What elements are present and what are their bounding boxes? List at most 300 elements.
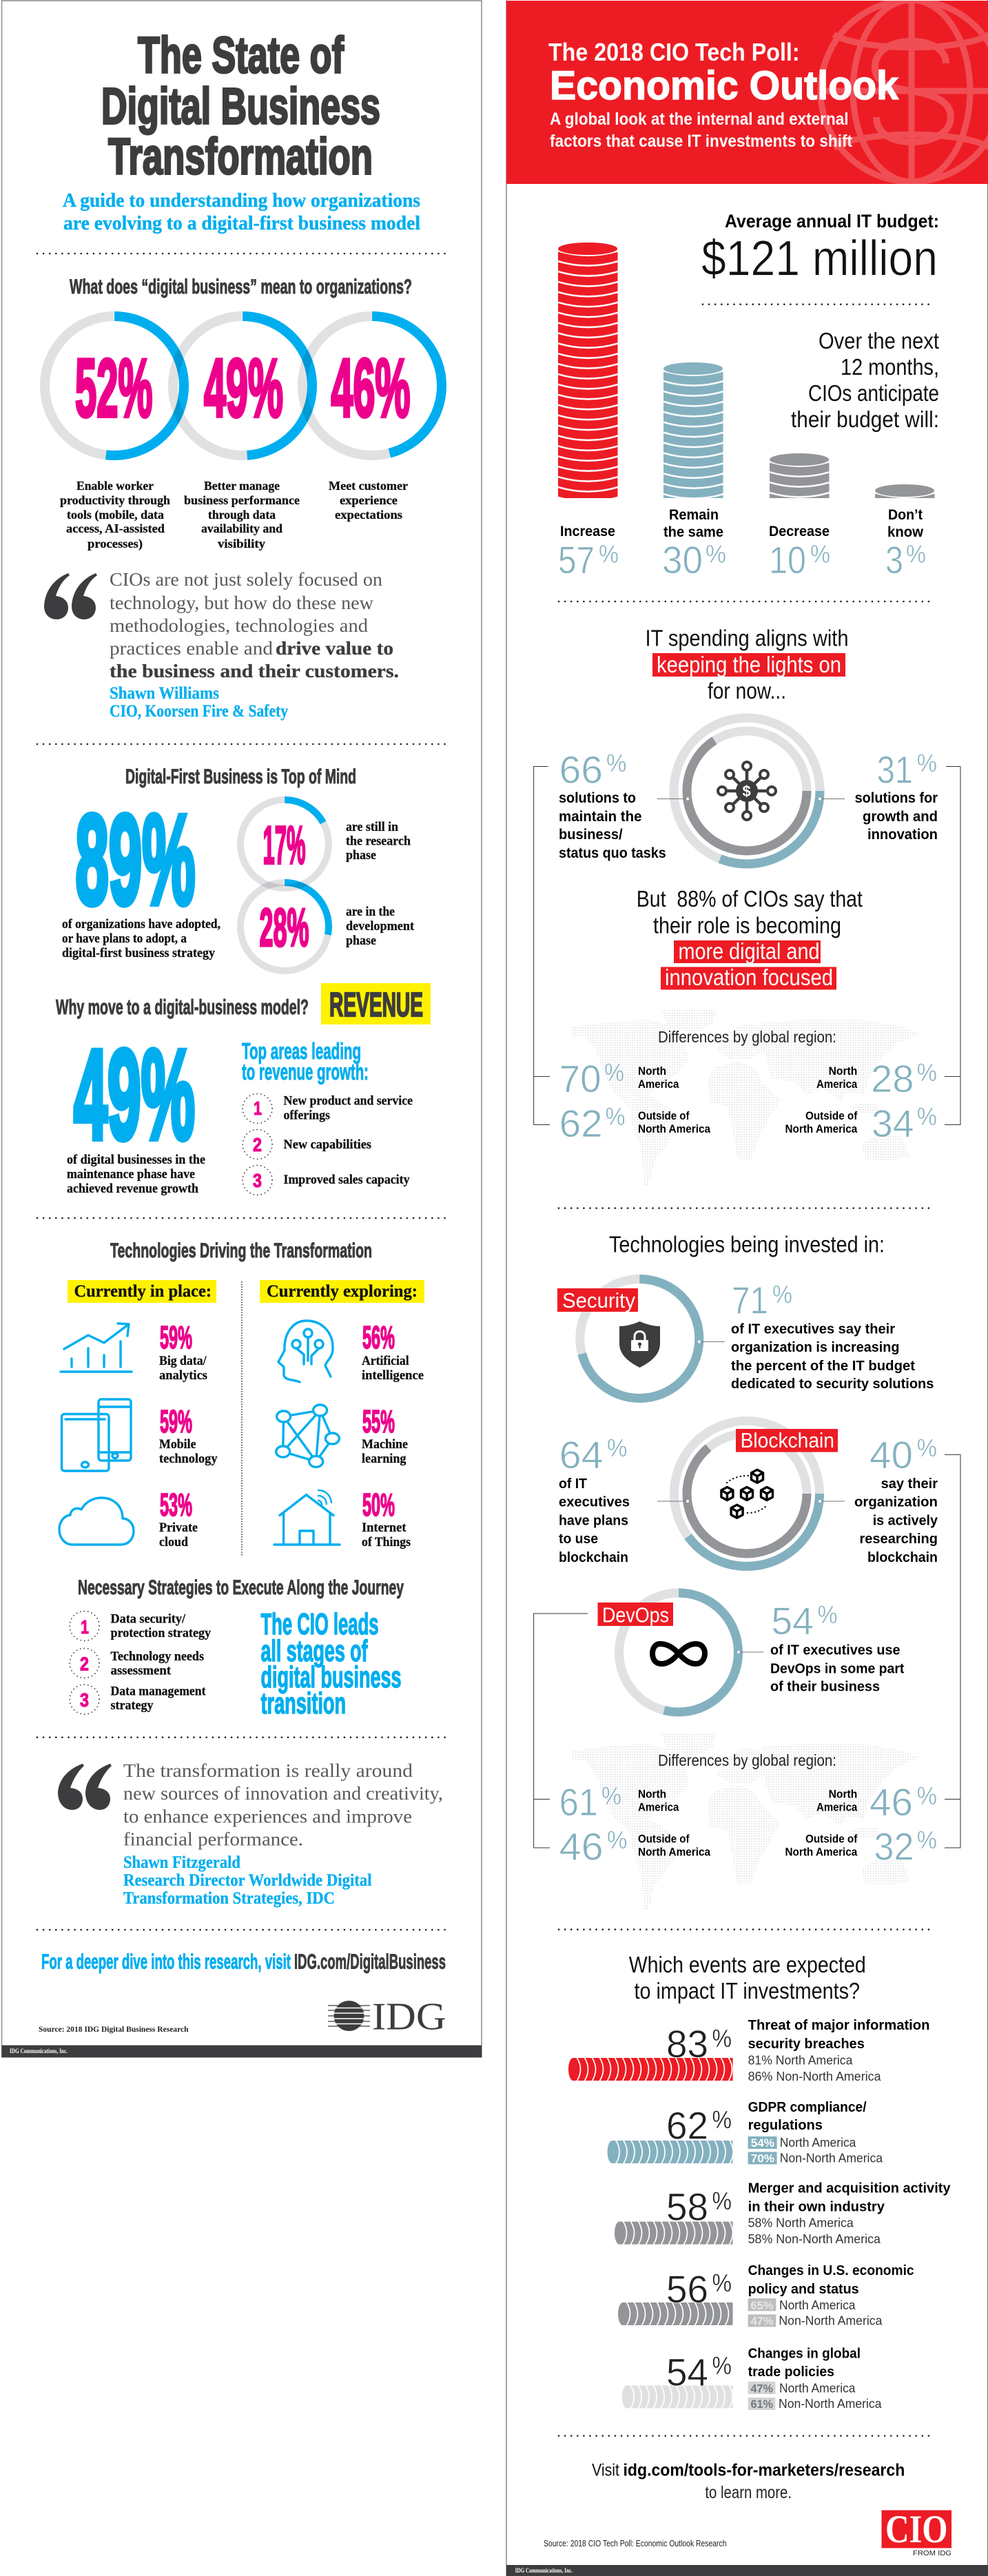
footer bar (506, 2565, 988, 2576)
stat: machine learning: Machine (362, 1437, 408, 1452)
title (548, 38, 899, 151)
bar: trade policies 54 percent: 47% (751, 2382, 773, 2395)
bar: security breaches 83 percent: Threat of major information (748, 2018, 930, 2033)
coin stack: do not know 3 percent (875, 484, 934, 581)
text: development phase: phase (346, 934, 376, 948)
stat: artificial intelligence (362, 1319, 424, 1383)
regional differences: technologies: 61 (559, 1780, 598, 1824)
bar: merger 58 percent: % (712, 2187, 732, 2215)
regional differences: technologies: North (829, 1787, 857, 1801)
list: strategies: Technology needs (110, 1649, 204, 1664)
stat: security 71 percent: 71 (732, 1279, 768, 1322)
stat: 40 percent researching: % (917, 1434, 937, 1462)
list: strategies (70, 1611, 211, 1714)
ring charts: 52 49 46 percent: 46% (331, 342, 411, 434)
text: development phase: are in the (346, 905, 395, 919)
quote: Shawn Fitzgerald: Shawn Fitzgerald (123, 1853, 240, 1872)
stat: 31 percent (855, 748, 938, 843)
bar: trade policies 54 percent: 54 (666, 2350, 708, 2393)
call to action: visit idg: to learn more. (705, 2483, 792, 2502)
bar: merger 58 percent: 58% North America (748, 2216, 854, 2230)
list: revenue growth areas (243, 1094, 413, 1195)
text: 88 percent of CIOs: But 88% of CIOs say that (637, 886, 863, 911)
heading: which events (629, 1952, 866, 2003)
regional differences: IT spending: America (638, 1078, 679, 1091)
quote: Shawn Williams: methodologies, technologies and (110, 615, 369, 636)
list: strategies: 1 (81, 1616, 89, 1638)
stat: artificial intelligence: 56% (362, 1319, 395, 1355)
regional differences: technologies: % (917, 1782, 937, 1810)
stat: big data: 59% (160, 1319, 192, 1355)
stat: 89 percent: 89% (76, 790, 196, 931)
stat: 49 percent: 49% (74, 1024, 195, 1166)
regional differences: IT spending: 70 (559, 1057, 601, 1100)
stat: 49 percent: of digital businesses in the (67, 1153, 205, 1167)
regional differences: technologies: North (638, 1787, 666, 1801)
regional differences: IT spending: % (605, 1102, 626, 1131)
title: factors that cause IT investments to shift (550, 132, 853, 151)
bar: trade policies 54 percent: % (712, 2351, 732, 2380)
quote: Shawn Williams: Shawn Williams (110, 684, 219, 703)
caption: enable worker productivity (60, 479, 170, 551)
list: strategies: Data security/ (110, 1612, 186, 1627)
stat: machine learning: learning (362, 1452, 406, 1466)
bar: security breaches 83 percent: security breaches (748, 2037, 865, 2052)
regional differences: technologies: North America (638, 1846, 710, 1859)
title: A global look at the internal and external (550, 110, 849, 129)
ring charts: research and development phase: 17% (263, 814, 306, 875)
bar: merger 58 percent: 58 (666, 2185, 708, 2229)
bar: economic policy 56 percent: 56 (666, 2267, 708, 2311)
quote: Shawn Fitzgerald: to enhance experiences and improve (123, 1806, 412, 1827)
quote: Shawn Fitzgerald: financial performance. (123, 1828, 303, 1849)
stat: 66 percent: status quo tasks (559, 845, 666, 861)
icon: blockchain cubes (721, 1470, 773, 1518)
regional differences: technologies: Outside of (805, 1833, 858, 1846)
bar: GDPR 62 percent: GDPR compliance/ (748, 2100, 867, 2115)
stat: big data (159, 1319, 207, 1383)
stat: private cloud: 53% (160, 1487, 192, 1523)
stat: security 71 percent: organization is increasing (731, 1340, 900, 1355)
stat: 31 percent: solutions for (855, 790, 938, 806)
call to action: visit idg: Visit (592, 2461, 619, 2480)
caption: meet customer experience expectations: expectations (335, 508, 402, 522)
stat: internet of things (362, 1487, 411, 1549)
stat: 31 percent: growth and (863, 809, 938, 825)
bar: economic policy 56 percent: 65% (751, 2299, 773, 2312)
stat: artificial intelligence: Artificial (362, 1354, 409, 1368)
regional differences: IT spending: % (917, 1058, 937, 1086)
heading: IT spending: IT spending aligns with (645, 625, 849, 650)
coin stack: decrease 10 percent: 10 (769, 538, 806, 581)
bar: economic policy 56 percent: % (712, 2269, 732, 2297)
heading: IT spending: for now... (708, 678, 786, 703)
stat: machine learning (362, 1403, 408, 1466)
bar: security breaches 83 percent: % (712, 2024, 732, 2052)
caption: meet customer experience expectations (329, 479, 408, 522)
ring charts: research and development phase: 28% (259, 897, 309, 958)
subtitle: A guide to understanding how organizations (63, 190, 420, 212)
caption: better manage business performance (184, 479, 300, 550)
coin stack: increase 57 percent (558, 243, 619, 581)
stat: 66 percent: solutions to (559, 790, 636, 806)
heading: top areas: to revenue growth: (242, 1059, 369, 1084)
bar: economic policy 56 percent: Changes in U.S. economic (748, 2263, 914, 2278)
bar: merger 58 percent: 58% Non-North America (748, 2232, 881, 2246)
text: over the next 12 months: Over the next (819, 328, 939, 353)
stat: internet of things: Internet (362, 1521, 406, 1535)
title: Transformation (108, 128, 373, 185)
heading: IT spending: keeping the lights on (657, 652, 841, 677)
text: over the next 12 months: their budget will: (791, 406, 939, 432)
coin stack: remain the same 30 percent: % (706, 540, 726, 568)
label: currently exploring: Currently exploring: (267, 1282, 418, 1301)
stat: big data: Big data/ (159, 1354, 207, 1368)
stat: artificial intelligence: intelligence (362, 1368, 424, 1383)
icon: machine learning network (276, 1405, 339, 1467)
stat: mobile technology (159, 1403, 218, 1466)
text: 88 percent of CIOs: their role is becoming (653, 913, 841, 938)
footer bar: IDG Communications, Inc. (515, 2567, 573, 2574)
stat: average IT budget: Average annual IT budget: (725, 211, 939, 231)
callout: CIO leads: all stages of (260, 1634, 368, 1668)
quote: Shawn Williams (110, 569, 399, 721)
list: revenue growth areas: 3 (253, 1170, 262, 1191)
title: The State of (138, 26, 344, 84)
bar: GDPR 62 percent: Non-North America (780, 2151, 883, 2165)
coin stack: decrease 10 percent: Decrease (769, 524, 830, 539)
regional differences: technologies (559, 1751, 937, 1868)
text: development phase: development (346, 919, 415, 934)
stat: security 71 percent: dedicated to security solutions (731, 1377, 934, 1392)
stat: 64 percent plans: % (607, 1434, 627, 1462)
call to action: deeper dive: IDG.com/DigitalBusiness (294, 1950, 446, 1973)
icon: infinity loop (652, 1644, 705, 1664)
coin stack: do not know 3 percent: Don’t (888, 507, 923, 523)
regional differences: technologies: % (607, 1826, 627, 1854)
list: revenue growth areas: 2 (253, 1134, 262, 1155)
regional differences: technologies: 32 (874, 1824, 914, 1868)
heading: technologies invested in: Technologies being invested in: (609, 1231, 885, 1257)
ring chart: devops 54 percent (598, 1593, 763, 1712)
stat: 66 percent: 66 (559, 748, 603, 792)
quote: Shawn Williams: technology, but how do these new (110, 593, 374, 613)
caption: meet customer experience expectations: experience (340, 493, 398, 507)
bar: security breaches 83 percent: 86% Non-North America (748, 2070, 882, 2083)
text: research phase: phase (346, 848, 376, 863)
icon: quotation mark (58, 1764, 112, 1810)
stat: 66 percent: % (606, 749, 627, 777)
heading: which events: to impact IT investments? (634, 1978, 860, 2003)
coin stack: increase 57 percent: 57 (558, 538, 595, 581)
caption: better manage business performance: availability and (201, 522, 282, 535)
coin stack: increase 57 percent: % (599, 540, 619, 568)
icon: AI head (278, 1321, 333, 1382)
stat: mobile technology: 59% (160, 1403, 192, 1439)
quote: Shawn Williams: the business and their customers. (110, 661, 399, 681)
icon: cloud (59, 1498, 134, 1545)
regional differences: technologies: America (816, 1801, 858, 1814)
text: over the next 12 months: CIOs anticipate (808, 380, 939, 406)
footer bar: IDG Communications, Inc. (10, 2048, 68, 2054)
quote: Shawn Williams: CIOs are not just solely focused on (110, 569, 383, 590)
callout: revenue (321, 983, 431, 1024)
logo: IDG: IDG (372, 1995, 446, 2038)
stat: 64 percent plans (559, 1433, 630, 1565)
regional differences: IT spending: Differences by global region: (658, 1028, 836, 1046)
bar: GDPR 62 percent: % (712, 2105, 732, 2134)
stat: 64 percent plans: to use (559, 1532, 598, 1547)
subtitle: are evolving to a digital-first business model (63, 213, 420, 234)
stat: security 71 percent: of IT executives say their (731, 1321, 895, 1337)
quote: Shawn Fitzgerald: Research Director Worldwide Digital (123, 1871, 372, 1890)
text: development phase (346, 905, 415, 948)
logo: CIO: CIO (885, 2508, 948, 2551)
quote: Shawn Williams: CIO, Koorsen Fire & Safety (110, 702, 288, 721)
title: The 2018 CIO Tech Poll: (548, 38, 800, 66)
ring charts: 52 49 46 percent: 49% (204, 342, 283, 434)
ring charts: 52 49 46 percent (45, 316, 442, 455)
stat: 89 percent (62, 790, 220, 960)
stat: 64 percent plans: of IT (559, 1476, 587, 1492)
caption: enable worker productivity: processes) (88, 537, 143, 551)
text: over the next 12 months: 12 months, (841, 354, 939, 380)
regional differences: IT spending: 62 (559, 1102, 603, 1145)
stat: 89 percent: digital-first business strategy (62, 946, 215, 960)
regional differences: technologies: % (601, 1782, 621, 1810)
regional differences: technologies: Differences by global region: (658, 1751, 836, 1769)
coin stack: remain the same 30 percent: the same (663, 524, 723, 540)
title: Digital Business (101, 77, 380, 135)
subtitle (63, 190, 420, 234)
bar: economic policy 56 percent: 47% (751, 2314, 773, 2327)
stat: devops 54 percent: 54 (771, 1599, 814, 1642)
bar: security breaches 83 percent: 81% North America (748, 2054, 853, 2068)
coin stack: decrease 10 percent: % (810, 540, 830, 568)
header banner (506, 0, 988, 184)
heading: top areas (242, 1038, 369, 1084)
coin stack: do not know 3 percent: 3 (885, 538, 903, 581)
heading: necessary strategies: Necessary Strategies to Execute Along the Journey (78, 1576, 404, 1599)
quote: Shawn Fitzgerald (123, 1760, 443, 1908)
bar: GDPR 62 percent: 62 (666, 2104, 708, 2147)
text: over the next 12 months (791, 328, 939, 432)
icon: smart house (274, 1490, 340, 1545)
regional differences: technologies: North America (785, 1846, 858, 1859)
regional differences: technologies: America (638, 1801, 679, 1814)
dotted world map (572, 1733, 919, 1909)
stat: 64 percent plans: have plans (559, 1513, 628, 1528)
regional differences: IT spending (559, 1028, 937, 1145)
stat: 31 percent: 31 (877, 748, 913, 792)
coin stack: remain the same 30 percent: Remain (669, 507, 719, 523)
list: revenue growth areas: New capabilities (284, 1137, 371, 1152)
quote: Shawn Fitzgerald: new sources of innovation and creativity, (123, 1783, 443, 1804)
donut chart: 66 and 31 percent (657, 718, 845, 864)
ring chart: security 71 percent: Security (562, 1288, 635, 1312)
stat: 64 percent plans: executives (559, 1495, 630, 1510)
bar: economic policy 56 percent (618, 2263, 914, 2327)
panel: economic outlook (506, 0, 988, 2576)
caption: enable worker productivity: Enable worker (76, 479, 154, 493)
callout: CIO leads: digital business (260, 1660, 401, 1694)
list: revenue growth areas: offerings (284, 1108, 330, 1123)
stat: 31 percent: innovation (867, 827, 938, 843)
stat: 89 percent: or have plans to adopt, a (62, 931, 187, 946)
icon: shield with lock (619, 1321, 660, 1368)
regional differences: technologies: Outside of (638, 1833, 690, 1846)
stat: security 71 percent: % (772, 1280, 792, 1308)
label: currently in place: Currently in place: (74, 1282, 212, 1301)
stat: internet of things: of Things (362, 1535, 411, 1549)
stat: security 71 percent: the percent of the IT budget (731, 1359, 915, 1374)
stat: private cloud (159, 1487, 198, 1549)
source: Source: 2018 IDG Digital Business Research (39, 2024, 189, 2034)
bar: trade policies 54 percent: trade policies (748, 2364, 834, 2380)
caption: better manage business performance: through data (208, 508, 276, 522)
coin stack: increase 57 percent: Increase (560, 524, 615, 539)
stat: 66 percent: maintain the (559, 809, 642, 825)
icon: analytics chart (61, 1323, 132, 1372)
bar: GDPR 62 percent (608, 2100, 883, 2165)
regional differences: IT spending: 34 (872, 1102, 914, 1145)
callout: revenue: REVENUE (329, 987, 423, 1024)
caption: better manage business performance: Better manage (204, 479, 280, 493)
title: Economic Outlook (550, 63, 899, 108)
list: strategies: Data management (110, 1684, 206, 1699)
stat: 49 percent (67, 1024, 205, 1196)
regional differences: IT spending: America (816, 1078, 858, 1091)
bar: merger 58 percent (615, 2181, 951, 2246)
stat: 40 percent researching (854, 1433, 938, 1565)
stat: 40 percent researching: 40 (869, 1433, 913, 1476)
icon: tablet and phone (62, 1399, 131, 1471)
list: strategies: assessment (110, 1664, 172, 1678)
list: strategies: 3 (80, 1689, 89, 1711)
stat: private cloud: Private (159, 1521, 198, 1535)
bar: trade policies 54 percent (622, 2347, 882, 2411)
title (101, 26, 380, 185)
stat: 64 percent plans: blockchain (559, 1550, 628, 1565)
footer bar (1, 2046, 482, 2057)
list: strategies: 2 (80, 1653, 89, 1674)
call to action: deeper dive: For a deeper dive into this research, visit (41, 1950, 291, 1973)
quote: Shawn Fitzgerald: Transformation Strategies, IDC (123, 1889, 335, 1908)
quote: Shawn Fitzgerald: The transformation is really around (123, 1760, 413, 1781)
caption: better manage business performance: business performance (184, 493, 300, 507)
stat: 40 percent researching: blockchain (867, 1550, 938, 1565)
stat: internet of things: 50% (362, 1487, 395, 1523)
stat: devops 54 percent: of their business (770, 1680, 880, 1695)
regional differences: IT spending: Outside of (805, 1109, 858, 1122)
bar: merger 58 percent: Merger and acquisition activity (748, 2181, 951, 2196)
bar: trade policies 54 percent: North America (779, 2381, 856, 2395)
stat: devops 54 percent: of IT executives use (770, 1643, 900, 1658)
stat: 49 percent: maintenance phase have (67, 1167, 195, 1182)
regional differences: IT spending: North America (638, 1122, 710, 1135)
stat: mobile technology: technology (159, 1452, 218, 1466)
stat: 31 percent: % (917, 749, 937, 777)
donut chart: blockchain (657, 1421, 845, 1567)
callout: CIO leads: The CIO leads (260, 1607, 379, 1641)
coin stack: remain the same 30 percent: 30 (662, 538, 703, 581)
text: 88 percent of CIOs: more digital and (678, 938, 820, 964)
text: 88 percent of CIOs (637, 886, 863, 990)
list: revenue growth areas: 1 (254, 1098, 262, 1119)
stat: 89 percent: of organizations have adopted, (62, 917, 220, 931)
ring charts: 52 49 46 percent: 52% (75, 342, 153, 434)
bar: economic policy 56 percent: policy and status (748, 2282, 859, 2297)
bar: GDPR 62 percent: North America (780, 2136, 856, 2150)
heading: digital-first: Digital-First Business is Top of Mind (125, 765, 356, 788)
callout: CIO leads: transition (260, 1687, 346, 1720)
caption: better manage business performance: visibility (218, 537, 265, 550)
regional differences: IT spending: North (829, 1064, 857, 1078)
stat: mobile technology: Mobile (159, 1437, 196, 1452)
stat: devops 54 percent (770, 1599, 905, 1695)
regional differences: IT spending: North (638, 1064, 666, 1078)
stat: 66 percent: business/ (559, 827, 623, 843)
bar: trade policies 54 percent: 61% (751, 2398, 773, 2411)
heading: IT spending (645, 625, 849, 703)
bar: GDPR 62 percent: 54% (751, 2136, 774, 2150)
stat: big data: analytics (159, 1368, 207, 1383)
caption: meet customer experience expectations: Meet customer (329, 479, 408, 493)
stat: average IT budget: $121 million (701, 231, 938, 287)
list: revenue growth areas: Improved sales capacity (284, 1173, 410, 1187)
panel: digital business transformation (1, 1, 482, 2057)
coin stack: remain the same 30 percent (662, 362, 726, 581)
heading: top areas: Top areas leading (242, 1038, 361, 1064)
heading: what does digital business mean: What does “digital business” mean to organizations? (70, 276, 412, 298)
regional differences: technologies: 46 (559, 1824, 604, 1868)
stat: devops 54 percent: DevOps in some part (770, 1661, 905, 1676)
heading: why move: Why move to a digital-business model? (56, 995, 309, 1019)
list: revenue growth areas: New product and service (284, 1094, 413, 1108)
regional differences: technologies: % (917, 1826, 937, 1854)
regional differences: IT spending: % (917, 1102, 937, 1131)
bar: trade policies 54 percent: Changes in global (748, 2347, 861, 2362)
logo: CIO: FROM IDG (913, 2550, 951, 2557)
icon: dollar hub: $ (743, 783, 751, 800)
caption: enable worker productivity: tools (mobile, data (67, 508, 164, 522)
text: 88 percent of CIOs: innovation focused (665, 965, 833, 990)
donut chart: blockchain: Blockchain (741, 1428, 834, 1452)
quote: Shawn Williams: drive value to (276, 638, 393, 659)
callout: CIO leads (260, 1607, 401, 1720)
source: Source: 2018 CIO Tech Poll: Economic Outlook Research (544, 2538, 726, 2548)
stat: 40 percent researching: say their (881, 1476, 938, 1492)
stat: security 71 percent (731, 1279, 934, 1392)
stat: devops 54 percent: % (818, 1600, 838, 1629)
coin stack: do not know 3 percent: % (906, 540, 926, 568)
bar: GDPR 62 percent: 70% (751, 2152, 774, 2165)
logo: IDG (328, 1995, 446, 2038)
list: strategies: protection strategy (110, 1626, 211, 1640)
coin stack: decrease 10 percent (769, 453, 830, 581)
regional differences: IT spending: North America (785, 1122, 858, 1135)
ring chart: security 71 percent (557, 1279, 725, 1399)
icon: globe with dollar sign (821, 0, 988, 184)
regional differences: IT spending: % (604, 1058, 624, 1086)
bar: economic policy 56 percent: Non-North America (779, 2314, 883, 2327)
ring chart: devops 54 percent: DevOps (602, 1603, 669, 1627)
stat: average IT budget (701, 211, 939, 287)
stat: 40 percent researching: is actively (873, 1513, 938, 1528)
bar: merger 58 percent: in their own industry (748, 2200, 885, 2215)
call to action: visit idg: idg.com/tools-for-marketers/research (623, 2461, 905, 2480)
regional differences: IT spending: Outside of (638, 1109, 690, 1122)
